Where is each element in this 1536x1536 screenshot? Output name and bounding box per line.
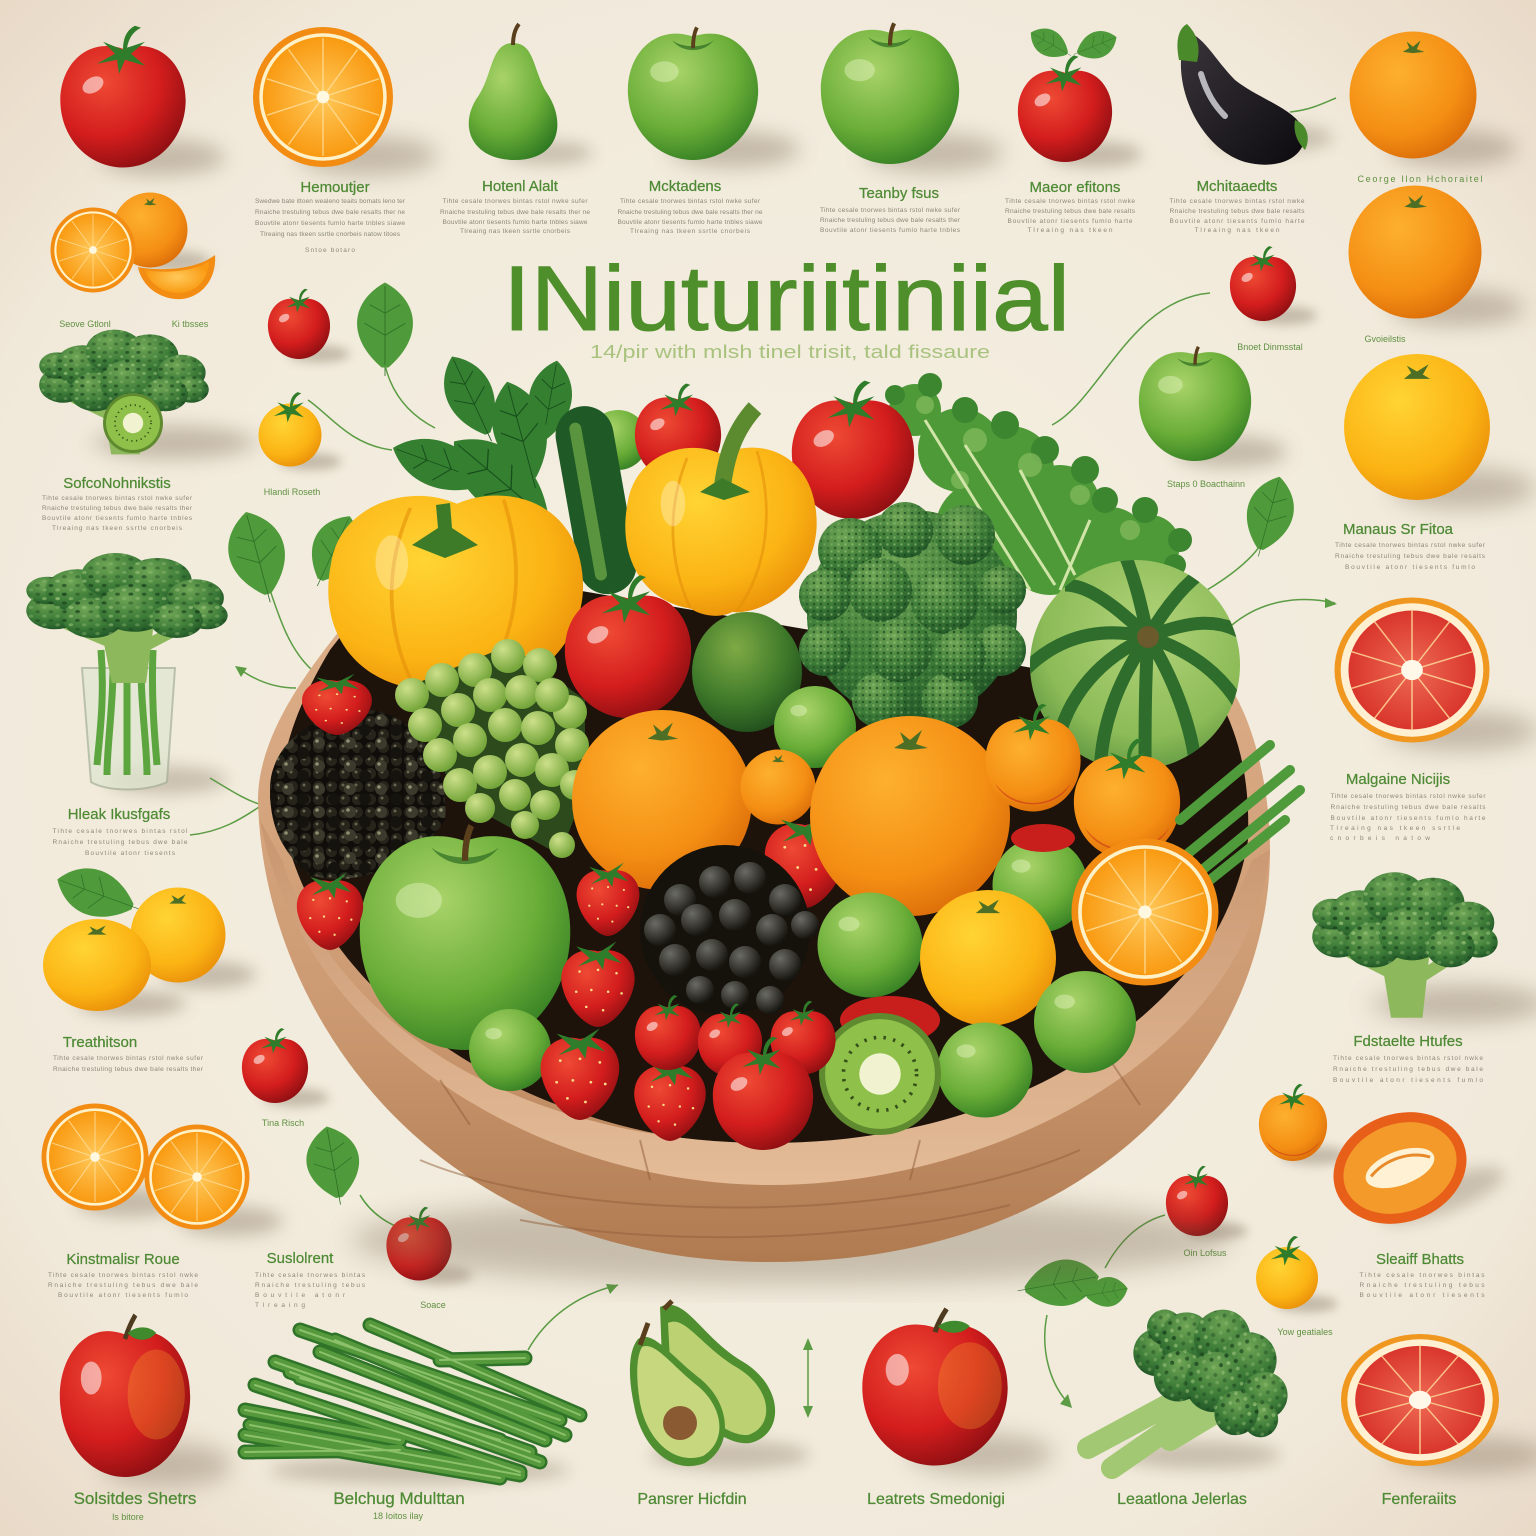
- bottom labels: ls bitore: [112, 1512, 144, 1522]
- top row labels: Mcktadens: [649, 178, 721, 195]
- top row: green apple: [628, 27, 800, 168]
- bottom labels: Solsitdes Shetrs: [74, 1489, 196, 1508]
- left label: Hleak Ikusfgafs: Hleak Ikusfgafs: [68, 806, 170, 823]
- right small label: Bnoet Dinmsstal: Bnoet Dinmsstal: [1237, 342, 1303, 352]
- bottom labels: Fenferaiits: [1382, 1491, 1456, 1508]
- label: Suslolrent: [255, 1250, 366, 1309]
- floating leaves: [219, 505, 370, 609]
- leaves near bottom: [1014, 1254, 1130, 1313]
- top row labels: Maeor efitons: [1030, 179, 1120, 196]
- right label: Sleaiff Bhatts: [1360, 1251, 1485, 1299]
- top row labels: Tlreaing nas tkeen ssrtle cnorbeis: [630, 228, 751, 235]
- back leaves: [385, 347, 578, 549]
- right: grapefruit: [1334, 598, 1536, 751]
- right label: Fdstaelte Htufes: [1333, 1033, 1483, 1084]
- small label: Tina Risch: Tina Risch: [262, 1118, 304, 1128]
- right label: Malgaine Nicijis: cnorbeis natow: [1330, 835, 1430, 842]
- right label: Sleaiff Bhatts: Bouvtile atonr tiesents: [1360, 1292, 1485, 1299]
- small orange: [740, 750, 816, 824]
- strawberry middle: [765, 814, 845, 908]
- left: broccoli in glass: [26, 553, 228, 794]
- left label: Hleak Ikusfgafs: Tihte cesale tnorwes bintas rstol: [52, 828, 188, 835]
- left label: Treathitson: [53, 1034, 204, 1073]
- left label: Treathitson: Rnaiche trestuling tebus dwe bale resalts ther: [53, 1066, 204, 1073]
- cucumber: [551, 402, 641, 599]
- blackberries: [270, 710, 446, 879]
- bottom labels: Pansrer Hicfdin: [637, 1491, 747, 1508]
- subtitle: 14/pir with mlsh tinel trisit, tald fissaure: [590, 342, 990, 362]
- left label: SofcoNohnikstis: Rnaiche trestuling tebus dwe bale resalts ther: [42, 505, 193, 512]
- red pepper: [792, 381, 914, 519]
- bottom: green beans: [245, 1325, 580, 1484]
- top row labels: Bouvtile atonr tiesents fumlo harte tnbles siawe: [442, 219, 588, 226]
- top row: pear: [469, 24, 593, 165]
- right: orange: [1348, 186, 1524, 326]
- label: Suslolrent: Rnaiche trestuling tebus: [255, 1282, 366, 1289]
- top row labels: Swedwe bate ittoen wealeno teaits bomats leno ter: [255, 198, 406, 205]
- small label: Soace: Soace: [420, 1300, 446, 1310]
- left label: SofcoNohnikstis: Tlreaing nas tkeen ssrtle cnorbeis: [52, 525, 183, 532]
- right label: Sleaiff Bhatts: Sleaiff Bhatts: [1376, 1251, 1464, 1268]
- right label: Manaus Sr Fitoa: Rnaiche trestuling tebus dwe bale resalts: [1335, 553, 1486, 560]
- right: orange halved: [1318, 1084, 1510, 1246]
- right label: Malgaine Nicijis: Bouvtile atonr tiesents fumlo harte: [1330, 815, 1486, 822]
- top row labels: Tlreaing nas tkeen: [1194, 227, 1280, 234]
- right label: Fdstaelte Htufes: Fdstaelte Htufes: [1353, 1033, 1463, 1050]
- top row labels: Tihte cesale tnorwes bintas rstol nwke sufer: [442, 198, 588, 205]
- top row labels: Tihte cesale tnorwes bintas rstol nwke: [1170, 198, 1305, 205]
- bowl front rim: [260, 820, 1270, 1185]
- green apple small: [469, 1009, 551, 1091]
- right: small red tomato: [1166, 1166, 1248, 1240]
- top row: orange slice: [253, 27, 438, 175]
- right label: Malgaine Nicijis: Tihte cesale tnorwes bintas rstol nwke sufer: [1330, 793, 1486, 800]
- right: yellow orange: [1344, 354, 1536, 509]
- lime: [938, 1022, 1032, 1118]
- small label: Oin Lofsus: Oin Lofsus: [1183, 1248, 1227, 1258]
- left label: Treathitson: Tihte cesale tnorwes bintas rstol nwke sufer: [53, 1055, 204, 1062]
- lime: [774, 686, 856, 768]
- top row labels: Bouvtile atonr tiesents fumlo harte: [1170, 218, 1305, 225]
- right label: Sleaiff Bhatts: Tihte cesale tnorwes bintas: [1360, 1272, 1485, 1279]
- left label: Kinstmalisr Roue: [48, 1251, 198, 1299]
- right label: Fdstaelte Htufes: Rnaiche trestuling tebus dwe bale: [1333, 1066, 1483, 1073]
- bottom: grapefruit: [1341, 1334, 1536, 1474]
- left: broccoli and kiwi: [39, 330, 255, 459]
- bottom: red apple 2: [862, 1309, 1054, 1474]
- left label: SofcoNohnikstis: [42, 475, 193, 532]
- left: small tomato: [242, 1028, 329, 1107]
- right label: Manaus Sr Fitoa: Manaus Sr Fitoa: [1343, 521, 1454, 538]
- black grapes: [640, 845, 819, 1015]
- right: small yellow tomato: [1256, 1236, 1338, 1313]
- watermelon: [1030, 560, 1240, 766]
- left small labels: [59, 319, 209, 329]
- wood grain: [420, 1060, 1140, 1237]
- bowl shadow: [350, 1195, 1230, 1285]
- top row labels: Tlreaing nas tkeen: [1028, 227, 1113, 234]
- top row labels: Teanby fsus: [859, 185, 939, 202]
- orange slice right: [1072, 838, 1218, 986]
- bottom labels: 18 Ioitos ilay: [373, 1511, 424, 1521]
- arrow heads: [235, 598, 1337, 1418]
- small label: Yow geatiales: Yow geatiales: [1277, 1327, 1333, 1337]
- left label: Kinstmalisr Roue: Kinstmalisr Roue: [66, 1251, 180, 1268]
- left: orange group: [50, 192, 215, 299]
- top row labels: Rnaiche trestuling tebus dwe bale resalts: [1170, 208, 1305, 215]
- big orange: [810, 716, 1010, 916]
- bowl inner dark: [280, 560, 1248, 1145]
- green beans right: [1180, 745, 1300, 880]
- bottom labels: [74, 1489, 1456, 1522]
- label: Suslolrent: Suslolrent: [267, 1250, 334, 1267]
- top row: tomato: [60, 26, 226, 175]
- top row labels: Rnaiche trestuling tebus dwe bale resalts: [1005, 208, 1136, 215]
- right label: Malgaine Nicijis: Rnaiche trestuling tebus dwe bale resalts: [1330, 804, 1486, 811]
- top row labels: Sntoe botaro: [305, 247, 355, 254]
- left: lemons: [43, 858, 256, 1017]
- title: INiuturiitiniial: [503, 248, 1070, 350]
- top row labels: Tihte cesale tnorwes bintas rstol nwke sufer: [620, 198, 761, 205]
- top row labels: Rnaiche trestuling tebus dwe bale resalts ther ne: [618, 209, 763, 216]
- avocado: [692, 612, 802, 732]
- right small label: Gvoieilstis: Gvoieilstis: [1364, 334, 1406, 344]
- bottom: avocado halves: [630, 1301, 810, 1470]
- green apple center: [818, 892, 922, 998]
- tomato center: [565, 575, 691, 718]
- top row labels: Bouvtile atonr tiesents fumlo harte tnbles siawe: [618, 219, 763, 226]
- top row labels: Rnaiche trestuling tebus dwe bale resalts ther: [820, 217, 961, 224]
- left label: SofcoNohnikstis: Tihte cesale tnorwes bintas rstol nwke sufer: [42, 495, 193, 502]
- top row: eggplant: [1177, 24, 1333, 165]
- label: Suslolrent: Tihte cesale tnorwes bintas: [255, 1272, 366, 1279]
- right small label: Staps 0 Boacthainn: Staps 0 Boacthainn: [1167, 479, 1245, 489]
- bottom: red apple: [60, 1315, 232, 1486]
- top row labels: Tlreaing nas tkeen ssrtle cnorbeis: [460, 228, 571, 235]
- right label: Malgaine Nicijis: Malgaine Nicijis: [1346, 771, 1450, 788]
- top row labels: Bouvtile atonr tiesents fumlo harte: [1008, 218, 1133, 225]
- yellow orange: [920, 890, 1056, 1026]
- right label: Fdstaelte Htufes: Bouvtile atonr tiesents fumlo: [1333, 1077, 1483, 1084]
- top row labels: Rnaiche trestuling tebus dwe bale resalts ther ne: [440, 209, 590, 216]
- left label: Hleak Ikusfgafs: [52, 806, 188, 857]
- top row labels: Tlreaing nas tkeen ssrtle cnorbeis natow titoes: [260, 231, 401, 238]
- orange tomato: [985, 704, 1081, 812]
- small label: Hlandi Roseth: Hlandi Roseth: [264, 487, 320, 497]
- orange left: [572, 710, 752, 890]
- connector lines: [190, 98, 1336, 1415]
- right label: Malgaine Nicijis: Tlreaing nas tkeen ssrtle: [1330, 825, 1460, 832]
- lime right: [1034, 971, 1136, 1073]
- big broccoli: [799, 502, 1026, 728]
- top row labels: [255, 174, 1482, 254]
- bottom labels: Belchug Mdulttan: [333, 1489, 465, 1508]
- top row labels: Hemoutjer: [300, 179, 370, 196]
- strawberry left: [297, 872, 363, 950]
- large green apple: [360, 826, 570, 1050]
- bowl body: [258, 630, 1270, 1262]
- top row labels: Bouvtile atonr tiesents fumlo harte tnbles: [820, 227, 961, 234]
- right: broccoli: [1312, 872, 1536, 1023]
- bottom labels: Leaatlona Jelerlas: [1117, 1491, 1247, 1508]
- strawberry top: [302, 674, 372, 735]
- top row labels: Tihte cesale tnorwes bintas rstol nwke: [1005, 198, 1135, 205]
- red back: [840, 996, 940, 1044]
- left: orange slices: [41, 1104, 283, 1236]
- right label: Manaus Sr Fitoa: [1335, 521, 1486, 571]
- green apple right: [992, 838, 1088, 932]
- tomato back: [635, 383, 721, 481]
- top row labels: Rnaiche trestuling tebus dwe bale resalts ther ne: [255, 209, 405, 216]
- right label: Fdstaelte Htufes: Tihte cesale tnorwes bintas rstol nwke: [1333, 1055, 1483, 1062]
- leaf and tomato: [301, 1122, 472, 1284]
- top row: orange: [1350, 32, 1517, 166]
- top row: tomato with leaves: [1018, 21, 1142, 168]
- top row labels: Mchitaaedts: [1197, 178, 1277, 195]
- left label: Kinstmalisr Roue: Tihte cesale tnorwes bintas rstol nwke: [48, 1272, 198, 1279]
- top row labels: Hotenl Alalt: [482, 178, 559, 195]
- left label: SofcoNohnikstis: SofcoNohnikstis: [63, 475, 171, 492]
- left label: Kinstmalisr Roue: Bouvtile atonr tiesents fumlo: [58, 1292, 188, 1299]
- small lime behind: [588, 410, 648, 470]
- right label: Sleaiff Bhatts: Rnaiche trestuling tebus: [1360, 1282, 1485, 1289]
- top row: green apple 2: [821, 23, 1003, 172]
- red accent: [1011, 824, 1075, 852]
- small tomatoes: [635, 995, 836, 1150]
- left label: SofcoNohnikstis: Bouvtile atonr tiesents fumlo harte tnbles: [42, 515, 193, 522]
- top row labels: Ceorge Ilon Hchoraitel: [1358, 174, 1482, 184]
- label: Suslolrent: Bouvtile atonr: [255, 1292, 346, 1299]
- left label: Treathitson: Treathitson: [63, 1034, 137, 1051]
- kiwi: [819, 1013, 941, 1135]
- right: small tomato: [1230, 246, 1317, 325]
- floating leaf: [357, 282, 413, 376]
- top row labels: Tihte cesale tnorwes bintas rstol nwke sufer: [820, 207, 961, 214]
- green grapes: [395, 639, 590, 858]
- right: green apple: [1139, 347, 1287, 468]
- strawberries: [541, 941, 706, 1141]
- left label: Hleak Ikusfgafs: Bouvtile atonr tiesents: [85, 850, 176, 857]
- bowl with produce: [258, 347, 1300, 1285]
- lettuce: [885, 373, 1192, 595]
- left label: Kinstmalisr Roue: Rnaiche trestuling tebus dwe bale: [48, 1282, 198, 1289]
- floating tomato: [268, 289, 350, 363]
- left small labels: Seove Gtlonl: [59, 319, 111, 329]
- top row labels: Bouvtile atonr tiesents fumlo harte tnbles siawe: [255, 220, 405, 227]
- left label: Hleak Ikusfgafs: Rnaiche trestuling tebus dwe bale: [52, 839, 188, 846]
- left small labels: Ki tbsses: [172, 319, 209, 329]
- big yellow pepper: [328, 496, 583, 697]
- yellow pepper: [625, 408, 817, 616]
- label: Suslolrent: Tlreaing: [255, 1302, 305, 1309]
- right label: Manaus Sr Fitoa: Tihte cesale tnorwes bintas rstol nwke sufer: [1335, 542, 1486, 549]
- right label: Malgaine Nicijis: [1330, 771, 1486, 842]
- orange right: [1074, 739, 1180, 859]
- strawberry center: [577, 863, 639, 936]
- right: small orange tomato: [1259, 1084, 1349, 1165]
- right label: Manaus Sr Fitoa: Bouvtile atonr tiesents fumlo: [1345, 564, 1475, 571]
- floating yellow tomato: [258, 392, 342, 470]
- right leaf: [1236, 471, 1302, 562]
- bottom labels: Leatrets Smedonigi: [867, 1491, 1005, 1508]
- bottom: broccoli: [1088, 1277, 1316, 1469]
